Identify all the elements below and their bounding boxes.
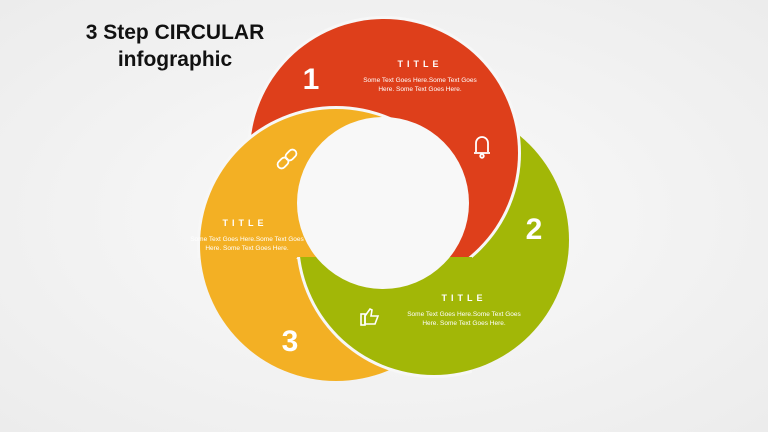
text block: step 2 [407, 293, 522, 327]
panel: step 3 yellow crescent [200, 109, 472, 381]
center white circle [297, 117, 469, 289]
panel: green overlap on yellow [297, 257, 472, 370]
text block: step 2: Here. Some Text Goes Here. [422, 320, 506, 327]
title: infographic [118, 48, 232, 71]
number 3: 3 [282, 325, 298, 358]
text block: step 1 [363, 59, 478, 93]
text block: step 3: Here. Some Text Goes Here. [205, 245, 289, 252]
text block: step 3: Some Text Goes Here.Some Text Goes [190, 236, 305, 243]
title: 3 Step CIRCULAR [86, 21, 264, 44]
title [86, 21, 264, 71]
text block: step 3 [190, 218, 305, 252]
icon: link [276, 148, 298, 170]
panel: step 2 green crescent [299, 105, 569, 375]
panel: yellow overlap on red [247, 106, 391, 258]
icon: bell [474, 137, 490, 158]
text block: step 1: TITLE [398, 59, 442, 69]
text block: step 1: Some Text Goes Here.Some Text Goes [363, 77, 478, 84]
number 1: 1 [303, 63, 319, 96]
number 2: 2 [526, 213, 542, 246]
text block: step 3: TITLE [222, 218, 268, 228]
panel: step 1 red crescent [247, 16, 521, 290]
icon: thumbs up [361, 309, 378, 325]
text block: step 2: Some Text Goes Here.Some Text Goes [407, 311, 522, 318]
text block: step 2: TITLE [442, 293, 486, 303]
text block: step 1: Here. Some Text Goes Here. [378, 86, 462, 93]
